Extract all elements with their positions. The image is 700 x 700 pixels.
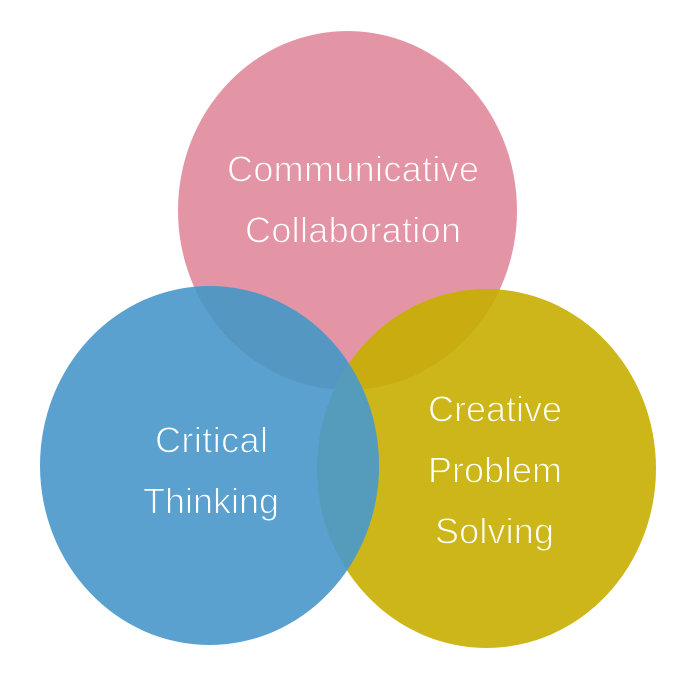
label: communicative collaboration: Collaboration	[245, 210, 461, 250]
venn diagram	[40, 31, 656, 648]
label: critical thinking: Thinking	[143, 480, 279, 522]
label: critical thinking	[143, 420, 279, 522]
label: creative problem solving: Creative	[428, 388, 562, 430]
panel: creative problem solving circle	[317, 289, 656, 648]
panel: communicative collaboration circle	[178, 31, 517, 390]
label: creative problem solving: Solving	[435, 510, 554, 552]
overlap: communicative and critical	[194, 286, 349, 390]
overlap: communicative and creative	[334, 289, 500, 390]
label: communicative collaboration	[227, 148, 479, 250]
label: creative problem solving: Problem	[428, 450, 562, 490]
label: creative problem solving	[428, 388, 562, 552]
overlap: critical and creative	[317, 364, 379, 570]
label: communicative collaboration: Communicative	[227, 148, 479, 190]
label: critical thinking: Critical	[155, 420, 268, 460]
panel: critical thinking circle	[40, 286, 379, 645]
